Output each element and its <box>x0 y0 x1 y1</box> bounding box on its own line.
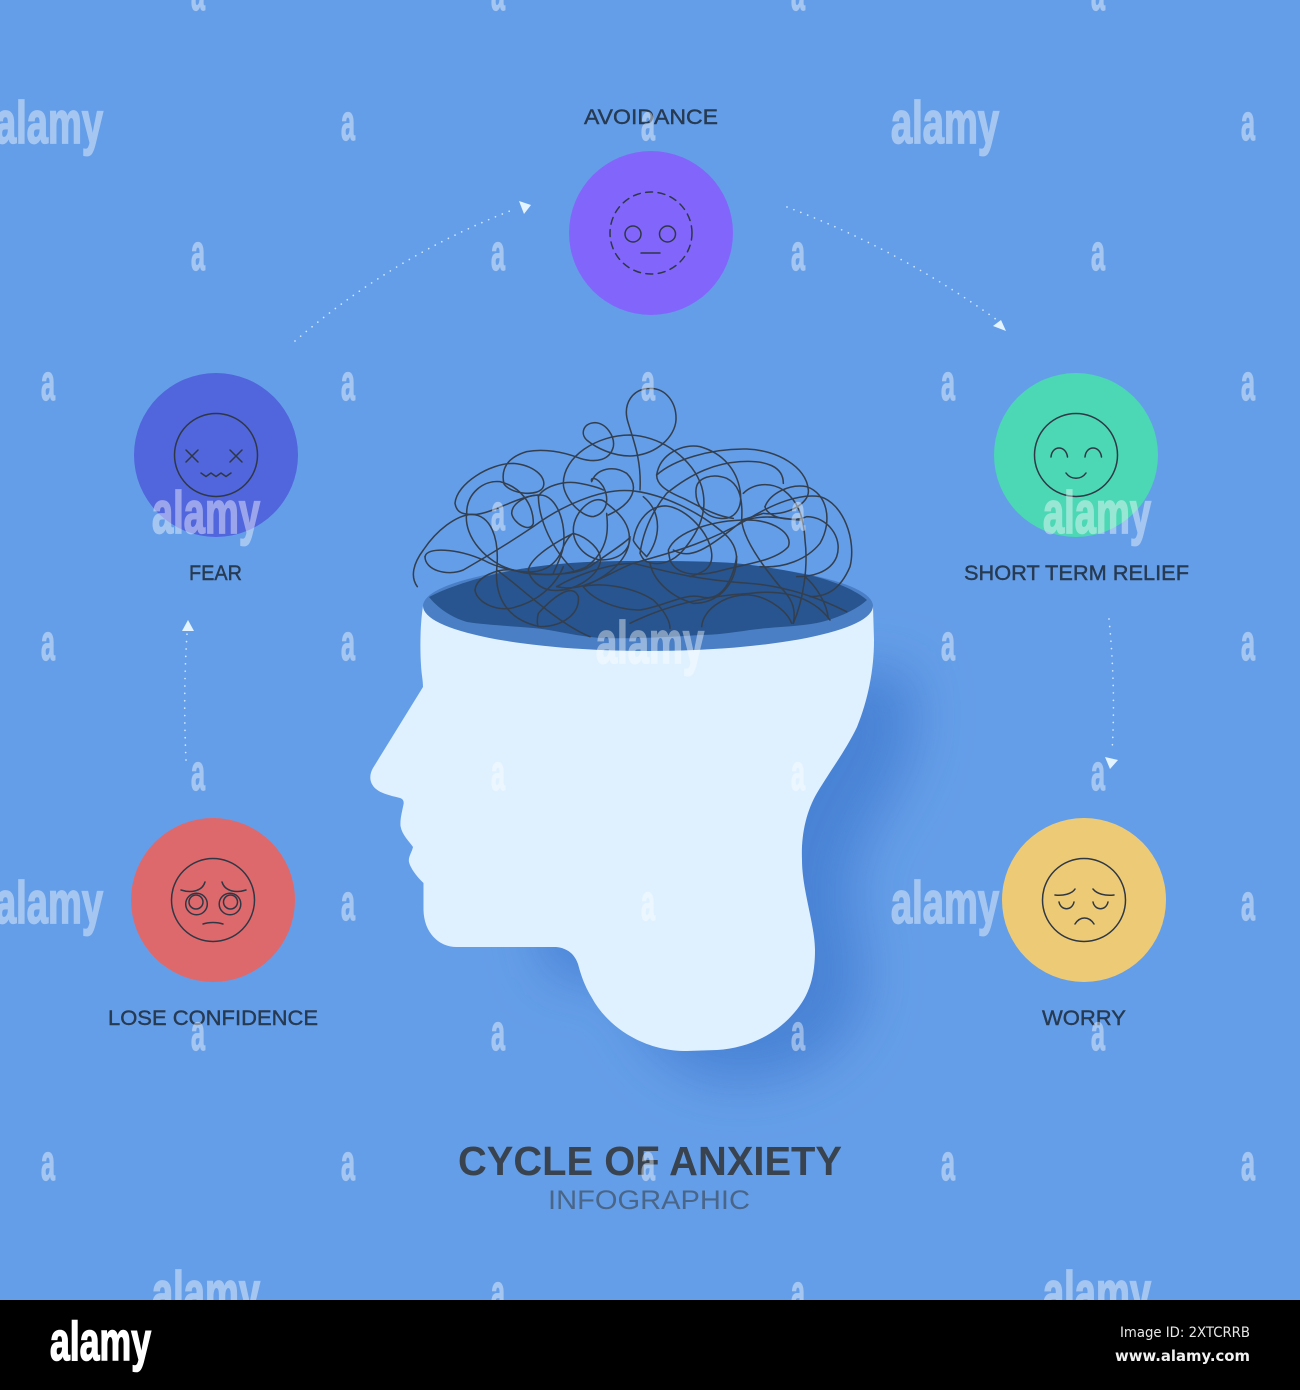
watermark pattern: a <box>941 614 955 671</box>
watermark pattern: a <box>191 744 205 801</box>
circle: avoidance <box>569 151 733 315</box>
watermark pattern: a <box>491 1004 505 1061</box>
watermark pattern: alamy <box>596 610 704 676</box>
watermark pattern: alamy <box>891 870 999 936</box>
watermark pattern: a <box>791 484 805 541</box>
watermark pattern: a <box>341 354 355 411</box>
watermark pattern: a <box>341 614 355 671</box>
watermark pattern: a <box>791 1264 805 1321</box>
watermark pattern: a <box>941 1134 955 1191</box>
head: face profile <box>370 606 874 1051</box>
title: cycle of anxiety: CYCLE OF ANXIETY <box>458 1138 842 1184</box>
watermark pattern: a <box>1241 1134 1255 1191</box>
watermark pattern: a <box>41 1134 55 1191</box>
watermark pattern: alamy <box>152 480 260 546</box>
subtitle: infographic: INFOGRAPHIC <box>548 1185 750 1215</box>
footer bar <box>0 1300 1300 1390</box>
watermark pattern: a <box>491 1264 505 1321</box>
watermark pattern: a <box>791 1004 805 1061</box>
node: fear <box>134 373 298 585</box>
circle: worry <box>1002 818 1166 982</box>
icon: dizzy wavy-mouth face <box>174 414 258 496</box>
watermark pattern: a <box>341 874 355 931</box>
watermark pattern: a <box>341 94 355 151</box>
watermark pattern: a <box>1241 614 1255 671</box>
head: dark opening <box>429 561 867 638</box>
node: short term relief <box>964 373 1189 585</box>
watermark pattern: a <box>191 1004 205 1061</box>
watermark pattern: a <box>641 874 655 931</box>
watermark pattern: a <box>1091 224 1105 281</box>
watermark pattern: a <box>491 484 505 541</box>
watermark pattern: a <box>41 614 55 671</box>
label: short term relief: SHORT TERM RELIEF <box>964 562 1189 585</box>
watermark pattern: a <box>1091 1004 1105 1061</box>
watermark pattern: a <box>41 354 55 411</box>
head: cut rim <box>423 561 873 651</box>
watermark pattern: alamy <box>0 870 103 936</box>
label: fear: FEAR <box>189 562 242 585</box>
footer image id: Image ID: 2XTCRRB <box>1120 1325 1250 1341</box>
watermark pattern: a <box>341 1134 355 1191</box>
watermark pattern: a <box>791 224 805 281</box>
head silhouette <box>370 561 874 1051</box>
heading: avoidance: AVOIDANCE <box>584 106 718 129</box>
watermark pattern: a <box>941 354 955 411</box>
icon: dashed neutral face <box>610 192 692 274</box>
watermark pattern: a <box>1241 94 1255 151</box>
watermark pattern: a <box>791 744 805 801</box>
label: worry: WORRY <box>1042 1007 1126 1030</box>
circle: fear <box>134 373 298 537</box>
arrow: avoidance to short term relief <box>787 207 1006 331</box>
node: lose confidence <box>108 818 318 1030</box>
title <box>458 1138 842 1215</box>
arrow: lose confidence to fear <box>182 620 194 760</box>
watermark pattern: a <box>641 354 655 411</box>
label: lose confidence: LOSE CONFIDENCE <box>108 1007 318 1030</box>
arrow: fear to avoidance <box>295 201 531 341</box>
node: avoidance <box>569 106 733 315</box>
circle: lose confidence <box>131 818 295 982</box>
icon: pleading face <box>172 858 254 942</box>
watermark pattern: a <box>641 94 655 151</box>
watermark pattern: alamy <box>0 90 103 156</box>
head shadow <box>490 670 915 1081</box>
icon: smiling face <box>1034 414 1118 496</box>
footer logo: alamy <box>50 1310 151 1372</box>
circle: short term relief <box>994 373 1158 537</box>
watermark pattern: a <box>191 224 205 281</box>
watermark pattern: alamy <box>1043 1260 1151 1326</box>
watermark pattern: alamy <box>152 1260 260 1326</box>
watermark pattern: a <box>491 224 505 281</box>
icon: sad face <box>1042 858 1126 942</box>
watermark pattern: a <box>641 1134 655 1191</box>
watermark pattern: a <box>491 744 505 801</box>
watermark pattern: alamy <box>1043 480 1151 546</box>
watermark pattern: a <box>1091 744 1105 801</box>
watermark pattern: a <box>1241 874 1255 931</box>
node: worry <box>1002 818 1166 1030</box>
watermark pattern: a <box>1241 354 1255 411</box>
watermark pattern: alamy <box>891 90 999 156</box>
arrow: short term relief to worry <box>1105 619 1118 769</box>
tangled scribble of thoughts <box>413 388 852 637</box>
footer url: www.alamy.com <box>1115 1347 1250 1365</box>
